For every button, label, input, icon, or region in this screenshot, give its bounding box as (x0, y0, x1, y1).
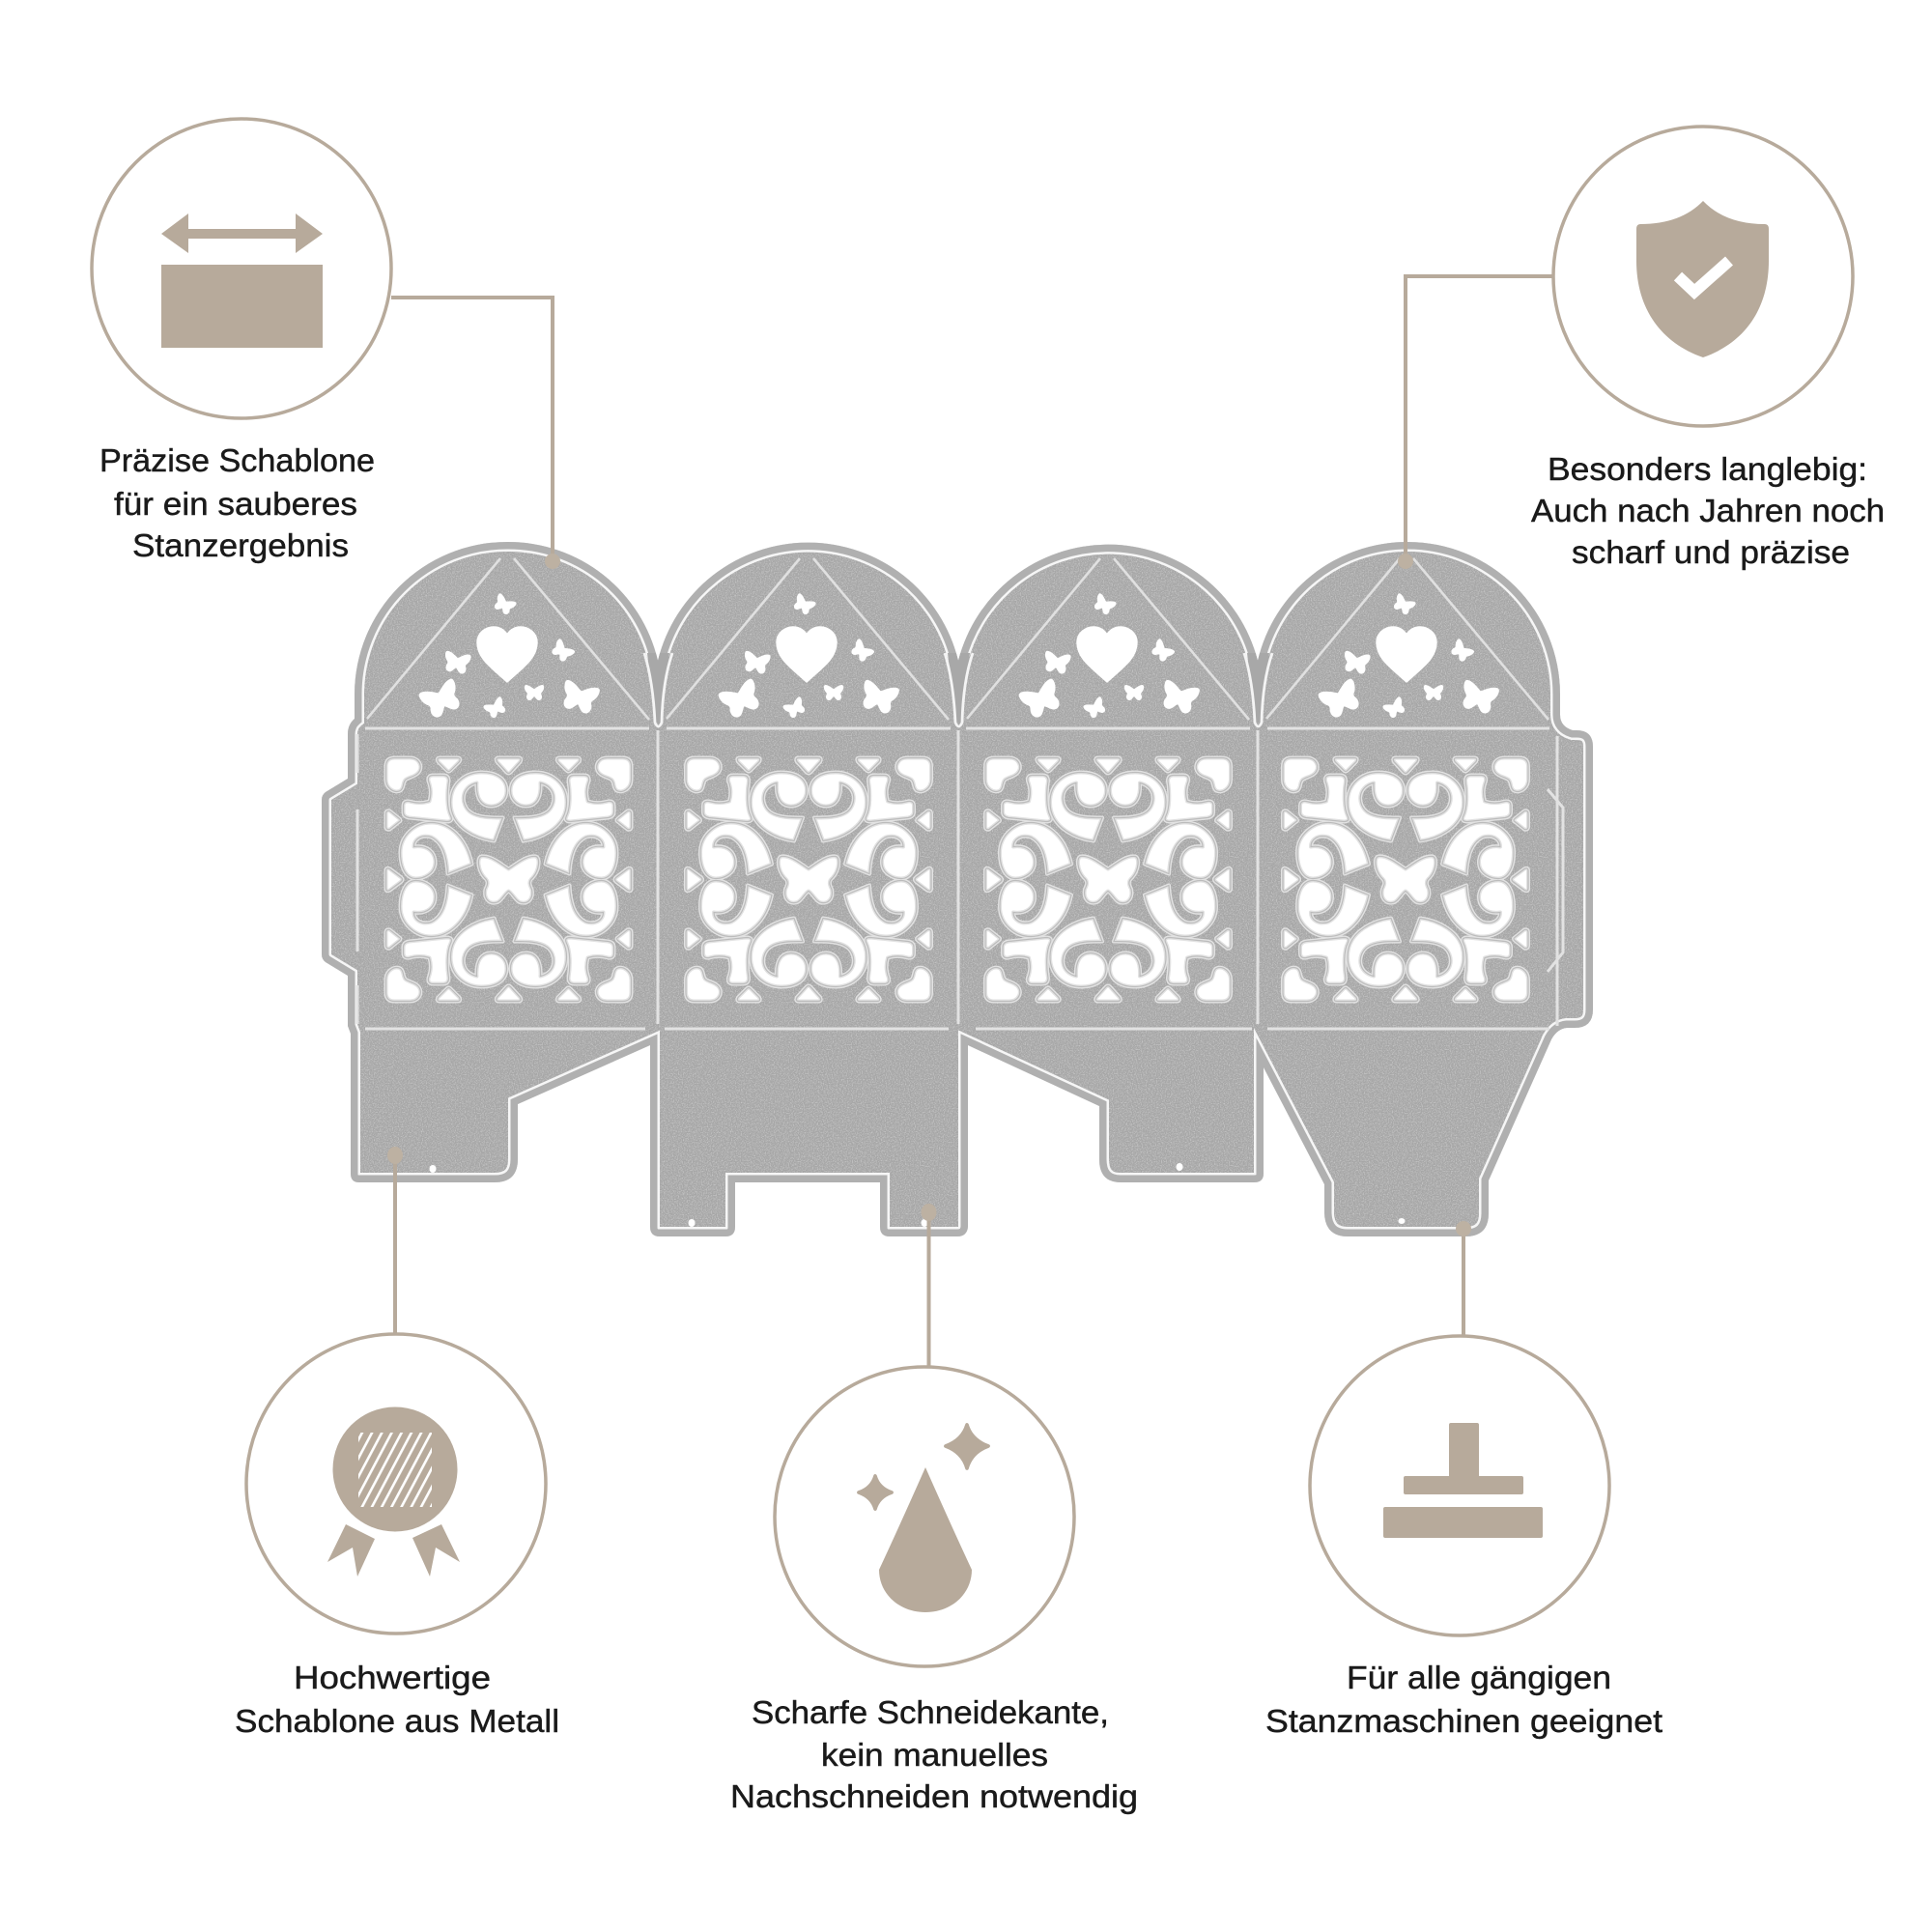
icon circle (1310, 1336, 1609, 1635)
callout: durable (1398, 127, 1885, 570)
connector dot (922, 1204, 937, 1221)
text block: für ein sauberes (114, 486, 357, 522)
callout: metal quality (235, 1147, 559, 1739)
callout: precise template (92, 119, 560, 569)
icon circle (1553, 127, 1853, 426)
connector line (393, 1155, 397, 1333)
text block: Scharfe Schneidekante, (752, 1694, 1109, 1730)
icon circle (775, 1367, 1074, 1666)
text block: Stanzergebnis (132, 527, 349, 563)
panel 4 ornament (1283, 757, 1528, 1001)
icon circle (92, 119, 391, 418)
text block (1265, 1660, 1662, 1739)
text block: Schablone aus Metall (235, 1703, 559, 1739)
connector line (1406, 276, 1552, 561)
panel 2 ornament (686, 757, 931, 1001)
text block (1531, 451, 1885, 570)
fold creases (357, 728, 1563, 1029)
icon: die press (1383, 1423, 1543, 1538)
text block: Auch nach Jahren noch (1531, 493, 1885, 528)
connector line (1462, 1229, 1465, 1336)
connector dot (387, 1147, 403, 1164)
connector dot (1456, 1221, 1471, 1236)
panel 1 ornament (386, 757, 632, 1001)
panel 2 lid cut-outs (667, 558, 949, 721)
connector line (391, 298, 553, 561)
text block: Besonders langlebig: (1548, 451, 1867, 487)
text block: kein manuelles (821, 1737, 1048, 1773)
text block: Nachschneiden notwendig (730, 1778, 1138, 1814)
die-cut stencil (322, 542, 1593, 1236)
icon: shield with check (1636, 201, 1769, 357)
text block (730, 1694, 1138, 1814)
icon: drop with sparkles (859, 1425, 988, 1612)
text block: scharf und präzise (1572, 534, 1850, 570)
connector line (927, 1212, 931, 1367)
stencil metal body (322, 542, 1593, 1236)
callout: machine compatibility (1265, 1221, 1662, 1739)
panel 1 lid cut-outs (367, 558, 649, 721)
text block: Präzise Schablone (99, 442, 375, 478)
text block (235, 1660, 559, 1739)
callout: sharp cutting edge (730, 1204, 1138, 1814)
flap holes (429, 1163, 1405, 1227)
panel 4 lid cut-outs (1266, 558, 1548, 721)
text block: Stanzmaschinen geeignet (1265, 1703, 1662, 1739)
stencil cutting edge lines (322, 542, 1593, 1236)
panel 3 ornament (985, 757, 1231, 1001)
icon circle (246, 1334, 546, 1634)
connector dot (545, 554, 560, 569)
text block: Hochwertige (294, 1660, 491, 1695)
text block (99, 442, 375, 563)
panel 3 lid cut-outs (967, 558, 1249, 721)
icon: width arrow over rectangle (161, 213, 323, 348)
icon: medal with ribbons (327, 1406, 460, 1577)
connector dot (1398, 554, 1413, 569)
text block: Für alle gängigen (1347, 1660, 1611, 1695)
